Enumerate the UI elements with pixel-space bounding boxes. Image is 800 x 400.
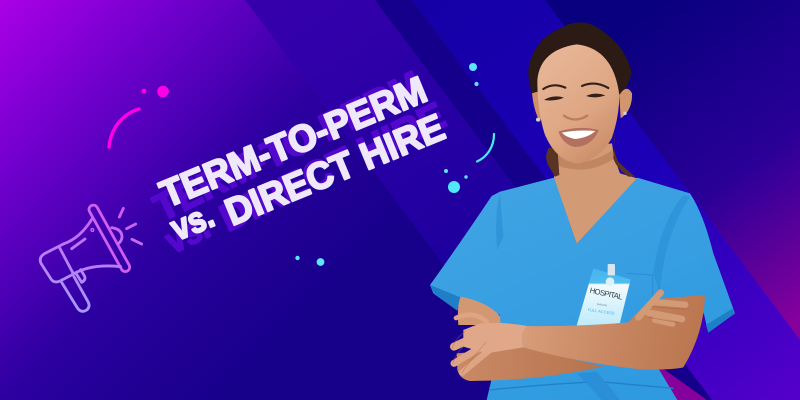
scrubs xyxy=(430,178,735,400)
icon: megaphone xyxy=(40,204,142,311)
smile xyxy=(558,128,599,147)
title shadow: DIRECT HIRE xyxy=(214,95,452,240)
badge xyxy=(577,264,631,327)
title text: vs. xyxy=(164,194,220,248)
badge: FULL ACCESS xyxy=(588,307,615,316)
ears xyxy=(532,92,544,122)
head xyxy=(528,22,632,164)
badge: MALVIN xyxy=(597,302,607,307)
title xyxy=(148,64,452,261)
cyan accent dots and arc xyxy=(295,63,494,266)
eyes xyxy=(544,96,564,100)
upper forearm xyxy=(522,295,705,369)
magenta accent dots and arc xyxy=(109,86,169,147)
neck and chest xyxy=(554,143,637,244)
lower forearm xyxy=(457,347,603,381)
brows xyxy=(543,85,565,89)
title text: TERM-TO-PERM xyxy=(154,69,433,216)
hair xyxy=(528,22,632,103)
face xyxy=(537,44,619,164)
title shadow: TERM-TO-PERM xyxy=(148,64,429,230)
badge: HOSPITAL xyxy=(589,286,623,302)
braids xyxy=(546,133,635,177)
nurse portrait xyxy=(430,22,735,400)
left hand xyxy=(454,315,492,373)
upper arm left xyxy=(458,297,501,325)
title text: DIRECT HIRE xyxy=(219,107,451,234)
title shadow: vs. xyxy=(159,205,216,261)
nose xyxy=(564,116,587,119)
right hand fingers xyxy=(638,293,685,324)
crossed arms xyxy=(452,293,705,381)
